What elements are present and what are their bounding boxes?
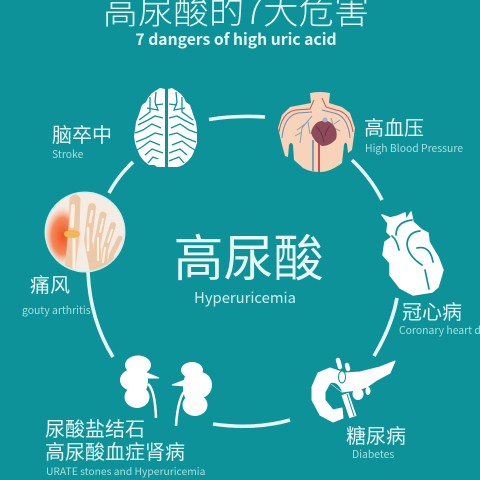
label: urate stones and kidney disease: 高尿酸血症肾病 [45,436,185,465]
icon: brain [134,88,197,167]
label: urate stones and kidney disease [45,413,205,478]
label: stroke [52,119,112,161]
label: urate stones and kidney disease: 尿酸盐结石 [45,413,145,442]
label: high blood pressure: High Blood Pressure [365,140,463,155]
label: diabetes: 糖尿病 [346,420,406,449]
label: stroke: Stroke [52,146,84,161]
label: diabetes: Diabetes [352,446,394,461]
center heading: 高尿酸 [174,219,324,291]
icon: kidneys [120,356,212,426]
icon: heart [382,212,443,295]
label: high blood pressure: 高血压 [364,112,424,141]
subtitle: 7 dangers of high uric acid [135,27,337,50]
photo: gouty foot [44,192,126,272]
icon: pancreas [312,360,395,422]
cycle ring arcs [88,116,397,426]
label: coronary heart disease: 冠心病 [402,296,462,325]
label: gout [22,269,91,317]
label: high blood pressure [364,112,463,155]
label: stroke: 脑卒中 [52,119,112,148]
label: gout: gouty arthritis [22,302,91,317]
label: coronary heart disease [399,296,480,337]
label: urate stones and kidney disease: URATE stones and Hyperuricemia [46,463,205,478]
center subheading: Hyperuricemia [194,287,296,308]
label: gout: 痛风 [30,269,70,298]
icon: torso with heart and vessels [278,92,355,172]
